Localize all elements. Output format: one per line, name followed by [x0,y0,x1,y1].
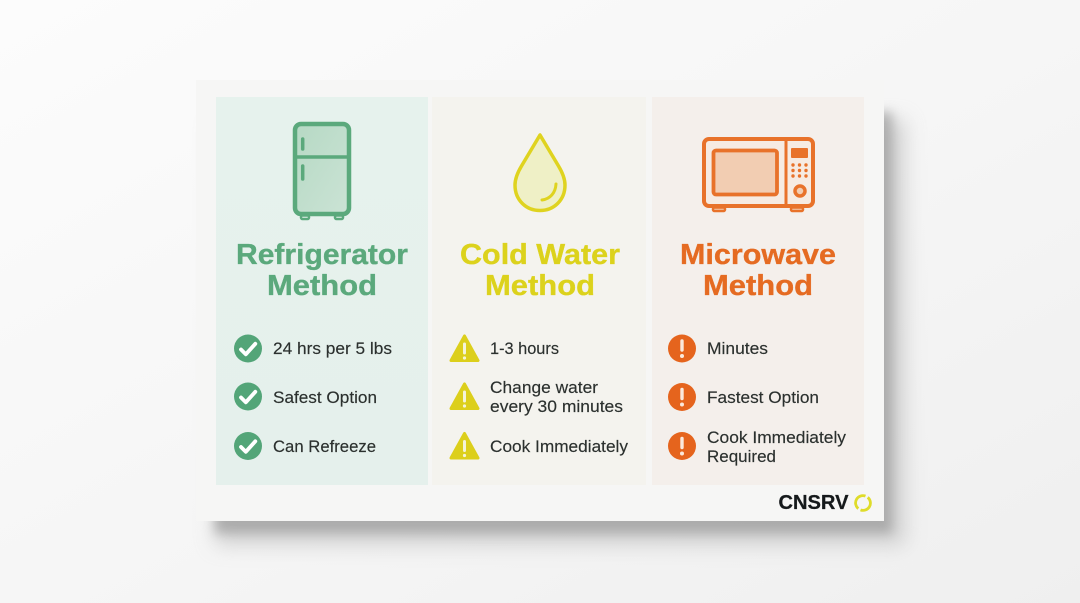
text: 1-3 hours: 1-3 hours [490,339,559,358]
panel: refrigerator method [216,97,428,485]
heading: Microwave Method [680,239,836,302]
text: Cook Immediately Required [707,428,846,466]
text: Change water every 30 minutes: every 30 minutes [490,397,623,416]
text: Fastest Option: Fastest Option [707,388,819,407]
icon: alert 1 [668,334,696,362]
text: Cook Immediately Required: Cook Immediately [707,428,846,447]
icon: refrigerator [295,124,349,219]
text: Cook Immediately Required: Required [707,447,776,466]
heading: Cold Water Method [460,239,620,302]
heading: Cold Water Method: Cold Water [460,239,620,271]
text: Change water every 30 minutes [490,378,623,416]
text: Cook Immediately: Cook Immediately [490,437,628,456]
text: Safest Option: Safest Option [273,388,377,407]
heading: Microwave Method: Method [703,270,813,302]
icon: warning 1 [451,336,478,360]
icon: water drop [515,135,565,210]
logo: CNSRV: CNSRV [778,492,849,514]
text: Minutes: Minutes [707,339,768,358]
icon: warning 3 [451,434,478,458]
icon: microwave [704,139,813,211]
icon: logo ring [856,496,870,510]
icon: alert 3 [668,432,696,460]
heading: Microwave Method: Microwave [680,239,836,271]
text: Change water every 30 minutes: Change water [490,378,598,397]
panel: cold water method [432,97,646,485]
text: 24 hrs per 5 lbs: 24 hrs per 5 lbs [273,339,392,358]
heading: Refrigerator Method [236,239,408,302]
icon: warning 2 [451,384,478,408]
heading: Refrigerator Method: Refrigerator [236,239,408,271]
heading: Refrigerator Method: Method [267,270,377,302]
panel: microwave method [652,97,864,485]
text: Can Refreeze: Can Refreeze [273,437,376,456]
icon: check 1 [234,334,262,362]
card [196,80,884,521]
heading: Cold Water Method: Method [485,270,595,302]
icon: check 2 [234,382,262,410]
card shadow [215,112,905,545]
icon: alert 2 [668,383,696,411]
icon: check 3 [234,432,262,460]
